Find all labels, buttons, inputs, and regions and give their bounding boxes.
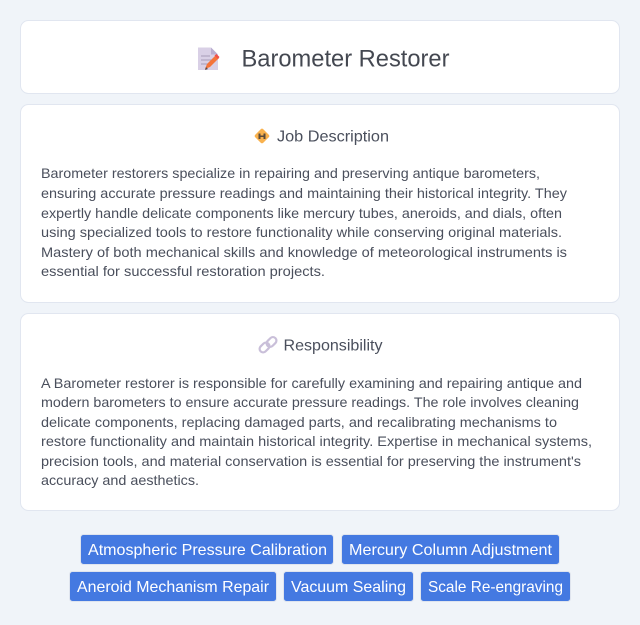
text: job description: Mastery of both mechanical skills and knowledge of meteorological instruments is (41, 244, 567, 260)
icon: chain link (258, 336, 278, 354)
text: responsibility (41, 375, 592, 488)
text: job description: Barometer restorers specialize in repairing and preserving antique barometers, (41, 165, 540, 181)
icon: diamond sign (254, 128, 270, 144)
tag: mercury column adjustment: Mercury Column Adjustment (349, 542, 553, 559)
icon: document with pencil (198, 48, 220, 70)
tag: mercury column adjustment (342, 534, 560, 564)
text: responsibility: restore functionality and maintain historical integrity. Expertise in mechanical systems, (41, 433, 592, 449)
tag: vacuum sealing: Vacuum Sealing (291, 579, 406, 596)
heading: title: Barometer Restorer (242, 46, 450, 72)
panel: title (20, 20, 620, 94)
text: job description: using specialized tools to restore functionality while conserving original materials. (41, 224, 562, 240)
tag: aneroid mechanism repair (70, 572, 276, 602)
text: job description: essential for successful restoration projects. (41, 263, 325, 279)
panel: responsibility (20, 314, 620, 510)
tag: scale re-engraving (420, 572, 570, 602)
text: responsibility: modern barometers to ensure accurate pressure readings. The role involves cleaning (41, 394, 579, 410)
tag: aneroid mechanism repair: Aneroid Mechanism Repair (77, 579, 270, 596)
tag: atmospheric pressure calibration (80, 534, 334, 564)
text: responsibility: accuracy and aesthetics. (41, 472, 199, 488)
tag: atmospheric pressure calibration: Atmospheric Pressure Calibration (88, 542, 327, 559)
heading: job description: Job Description (277, 128, 389, 146)
text: responsibility: A Barometer restorer is responsible for carefully examining and repairing antique and (41, 375, 582, 391)
text: job description (41, 165, 567, 279)
panel: job description (20, 104, 620, 302)
text: responsibility: delicate components, replacing damaged parts, and recalibrating mechanisms to (41, 414, 557, 430)
heading: responsibility: Responsibility (284, 338, 382, 354)
text: responsibility: precision tools, and material conservation is essential for preserving the instrument's (41, 453, 581, 469)
text: job description: ensuring accurate pressure readings and maintaining their historical integrity. They (41, 185, 567, 201)
tag: scale re-engraving: Scale Re-engraving (428, 579, 563, 596)
tag: vacuum sealing (284, 572, 414, 602)
text: job description: expertly handle delicate components like mercury tubes, aneroids, and dials, often (41, 205, 562, 221)
